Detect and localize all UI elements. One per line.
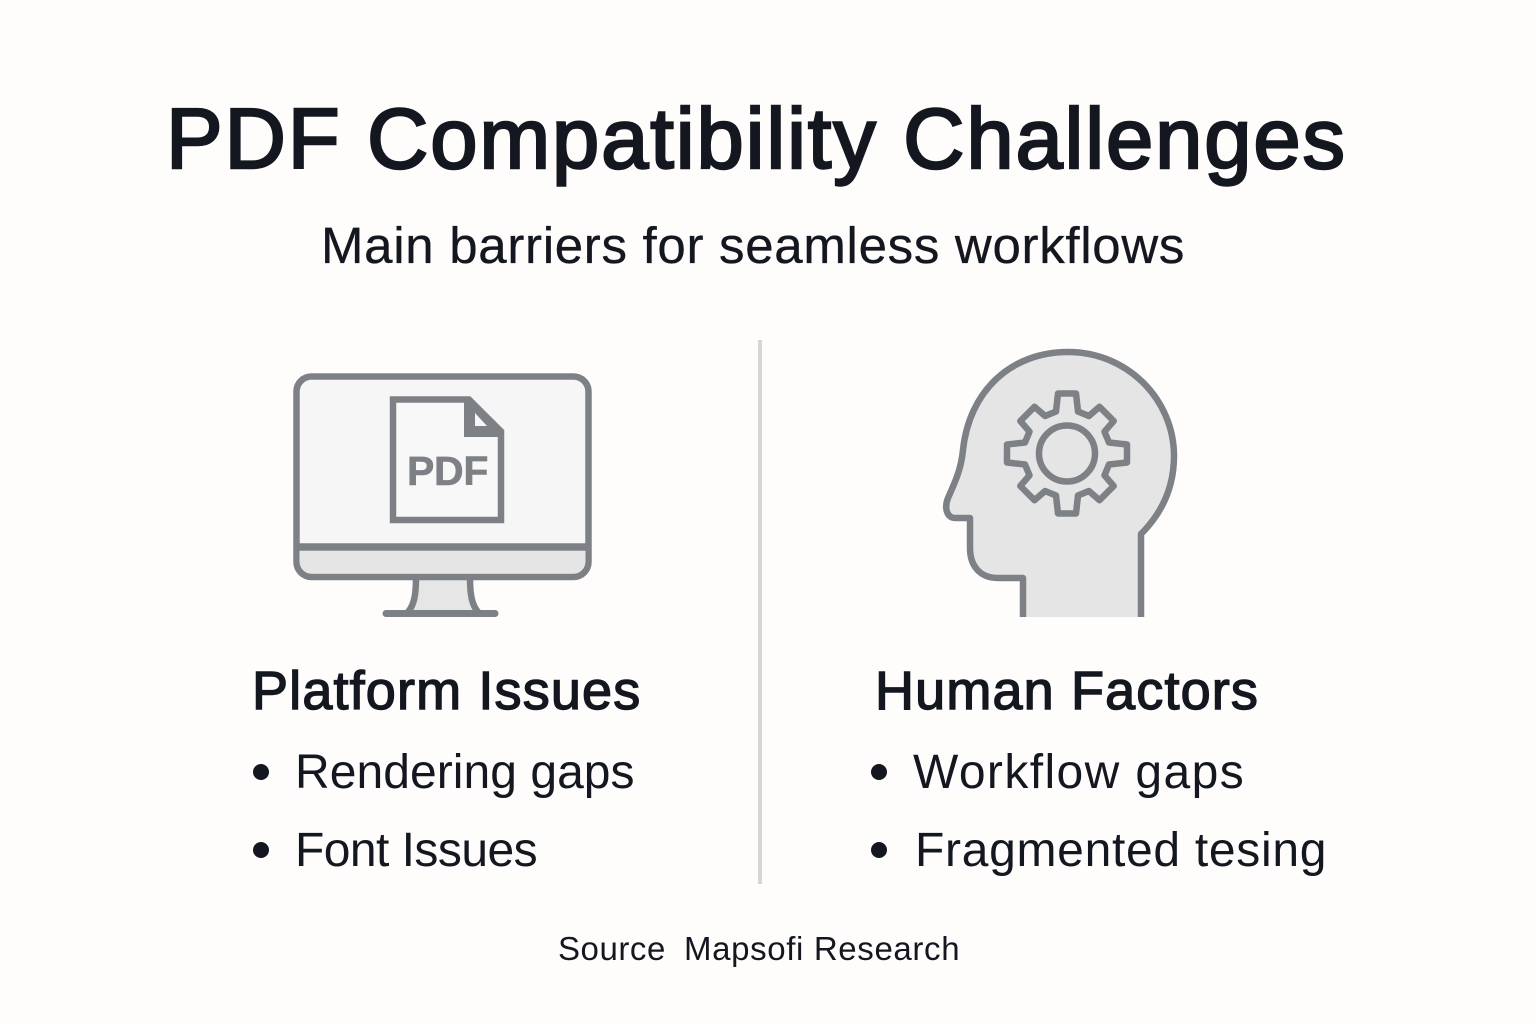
- icon: monitor with PDF: PDF: [407, 448, 488, 494]
- icon: head with gear: [942, 348, 1178, 617]
- bullet: workflow gaps: Workflow gaps: [913, 746, 1245, 799]
- left column heading: Platform Issues: [252, 661, 641, 721]
- source: [558, 930, 960, 967]
- right column heading: Human Factors: [875, 661, 1259, 721]
- bullet dot: [253, 842, 269, 858]
- bullet: fragmented testing: Fragmented tesing: [915, 824, 1327, 876]
- bullet dot: [871, 764, 887, 780]
- center divider: [758, 340, 762, 884]
- title: PDF Compatibility Challenges: [166, 92, 1347, 187]
- source: Source: [558, 930, 666, 967]
- bullet dot: [253, 764, 269, 780]
- left list: [253, 746, 635, 876]
- subtitle: Main barriers for seamless workflows: [321, 217, 1185, 274]
- bullet dot: [871, 842, 887, 858]
- source: Mapsofi Research: [684, 930, 960, 967]
- icon: monitor with PDF: [293, 373, 592, 617]
- right list: [871, 746, 1327, 876]
- bullet: rendering gaps: Rendering gaps: [295, 746, 635, 799]
- bullet: font issues: Font Issues: [295, 824, 537, 876]
